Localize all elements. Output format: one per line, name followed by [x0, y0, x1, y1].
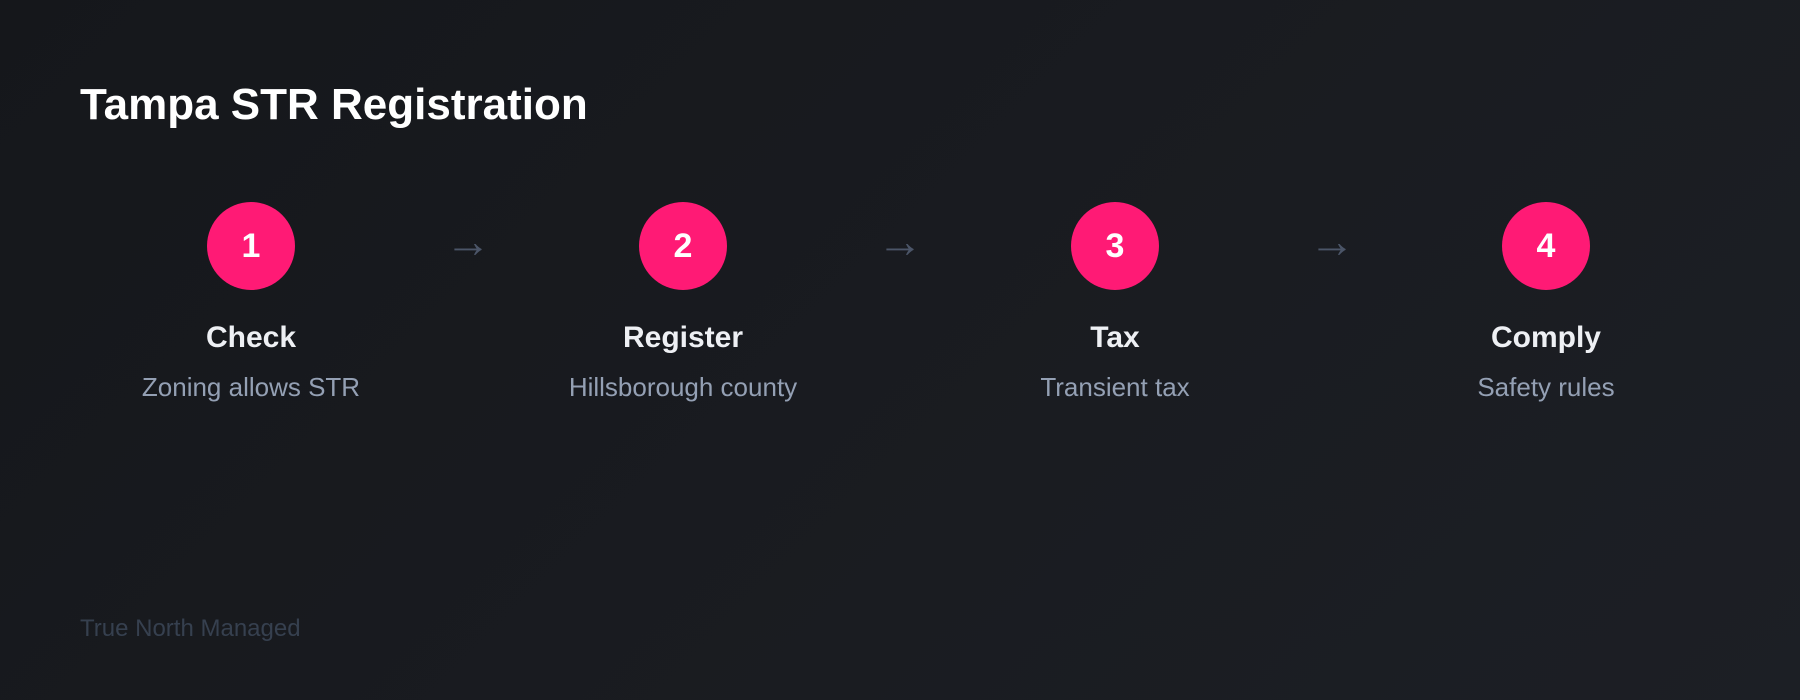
step 1: Zoning allows STR [142, 372, 360, 402]
step 1 [142, 202, 360, 402]
step 1: Check [206, 321, 296, 354]
step 3: Tax [1090, 321, 1140, 354]
step 1: 1 [242, 227, 260, 265]
step 4: Comply [1491, 321, 1601, 354]
step 4 [1477, 202, 1615, 402]
footer: True North Managed [80, 615, 301, 642]
step 2: Hillsborough county [569, 372, 797, 402]
arrow 1: → [445, 215, 491, 267]
step 3: Transient tax [1040, 372, 1190, 402]
step 3 [1040, 202, 1190, 402]
step 4: Safety rules [1477, 372, 1615, 402]
step 3: 3 [1106, 227, 1124, 265]
step 2: 2 [674, 227, 692, 265]
arrow 2: → [877, 215, 923, 267]
step 2 [569, 202, 797, 402]
arrow 3: → [1309, 215, 1355, 267]
step 2: Register [623, 321, 743, 354]
title: Tampa STR Registration [80, 80, 588, 129]
step 4: 4 [1537, 227, 1555, 265]
